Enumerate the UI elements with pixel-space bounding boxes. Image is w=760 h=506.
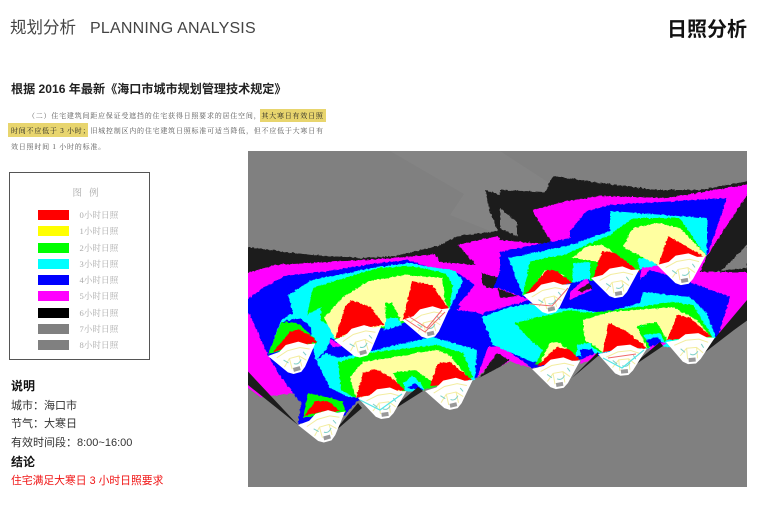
- magenta zone: [240, 183, 755, 400]
- magenta wedges: [457, 288, 530, 313]
- building block 12: [657, 253, 706, 286]
- legend label 6h: 6小时日照: [80, 308, 118, 318]
- conclusion heading: 结论: [11, 455, 35, 469]
- regulation paragraph: （二）住宅建筑间距应保证受遮挡的住宅获得日照要求的居住空间，其大寒日有效日照: [28, 112, 324, 120]
- legend label 8h: 8小时日照: [80, 340, 118, 350]
- building block 2: [358, 388, 406, 419]
- regulation paragraph: [11, 112, 324, 151]
- building block 11: [591, 266, 640, 298]
- building block 6: [666, 333, 715, 364]
- waterway lines: [360, 350, 644, 410]
- legend swatch 7h: [38, 324, 69, 334]
- legend swatch 4h: [38, 274, 69, 284]
- building block 4: [532, 357, 580, 390]
- title: 规划分析 PLANNING ANALYSIS: [10, 19, 256, 37]
- building block 5: [598, 344, 647, 376]
- notes heading: 说明: [11, 379, 35, 393]
- regulation heading: 根据 2016 年最新《海口市城市规划管理技术规定》: [11, 82, 286, 96]
- building block 3: [425, 378, 473, 410]
- notes: city: 城市：海口市: [11, 400, 77, 412]
- green zone: [307, 266, 453, 340]
- building block 8: [334, 325, 382, 358]
- legend label 1h: 1小时日照: [80, 226, 118, 236]
- section title: sunlight analysis: 日照分析: [667, 19, 747, 41]
- legend label 3h: 3小时日照: [80, 258, 118, 268]
- legend swatch 5h: [38, 290, 69, 300]
- black band: [240, 176, 755, 330]
- building block 7: [268, 342, 316, 374]
- legend label 5h: 5小时日照: [80, 290, 118, 300]
- legend label 4h: 4小时日照: [80, 274, 118, 284]
- legend swatch 2h: [38, 242, 69, 252]
- red zones: [335, 300, 384, 339]
- building block 1: [298, 410, 346, 442]
- building pipelines: [405, 288, 636, 358]
- legend label 7h: 7小时日照: [80, 324, 118, 334]
- conclusion text: 住宅满足大寒日 3 小时日照要求: [11, 475, 163, 487]
- legend label 0h: 0小时日照: [80, 210, 118, 220]
- notes: effective period: 有效时间段：8:00~16:00: [11, 437, 132, 449]
- notes: solar term: 节气：大寒日: [11, 418, 77, 430]
- building block 10: [523, 282, 571, 314]
- legend label 2h: 2小时日照: [80, 242, 118, 252]
- legend swatch 1h: [38, 226, 69, 236]
- highlight: first line: [260, 109, 326, 122]
- yellow zone: [324, 275, 449, 339]
- legend swatch 8h: [38, 340, 69, 350]
- building block 9: [402, 306, 450, 338]
- pockets between blocks: [384, 302, 400, 321]
- ground shadow area: [248, 320, 747, 400]
- legend swatch 0h: [38, 210, 69, 220]
- panel: legend: [8, 172, 150, 360]
- legend swatch 6h: [38, 308, 69, 318]
- legend title: 图 例: [72, 188, 99, 198]
- regulation paragraph: 效日照时间 1 小时的标准。: [11, 143, 106, 151]
- highlight: second line: [8, 123, 88, 137]
- cyan zone: [268, 263, 463, 355]
- legend swatch 3h: [38, 258, 69, 268]
- chart: sunlight simulation map: [248, 151, 747, 487]
- blue zone: [240, 198, 730, 425]
- regulation paragraph: 时间不应低于 3 小时；旧城控制区内的住宅建筑日照标准可适当降低，但不应低于大寒日有: [11, 127, 324, 135]
